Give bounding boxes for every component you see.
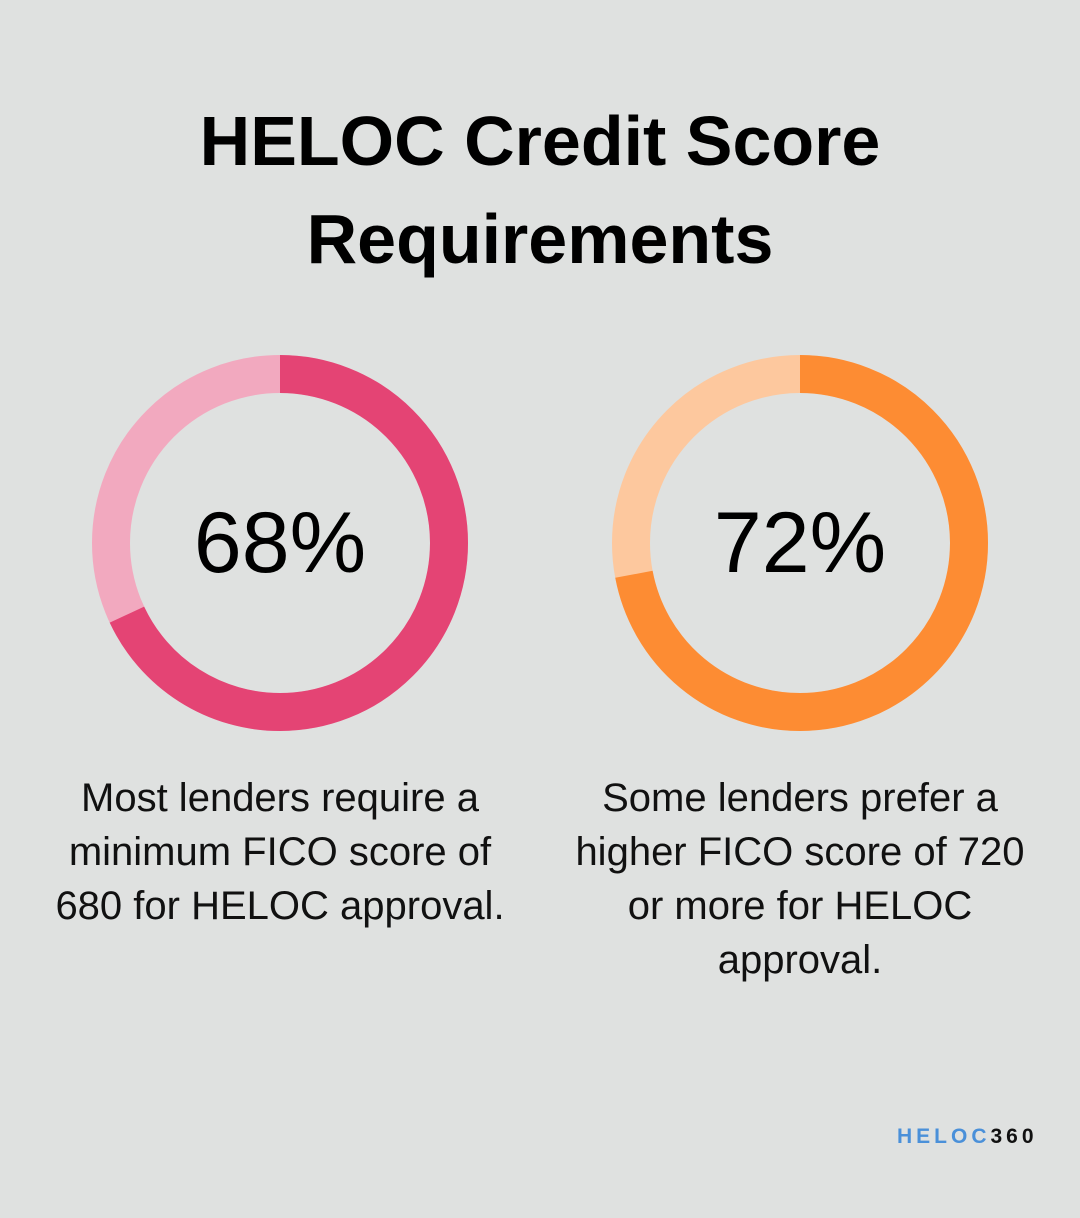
text: left description: minimum FICO score of <box>69 830 491 874</box>
logo: HELOC360 <box>897 1125 1038 1148</box>
title <box>200 102 880 278</box>
text: right description: Some lenders prefer a <box>602 776 998 820</box>
text: left description: 680 for HELOC approval. <box>55 884 505 928</box>
text: right description: approval. <box>718 938 882 982</box>
donut: 68%: 68% <box>194 495 366 591</box>
text: right description: or more for HELOC <box>628 884 972 928</box>
title: Requirements <box>307 200 773 278</box>
text: left description: Most lenders require a <box>81 776 479 820</box>
text: right description: higher FICO score of 720 <box>575 830 1025 874</box>
title: HELOC Credit Score <box>200 102 880 180</box>
donut: 68% <box>92 355 468 731</box>
donut: 72%: 72% <box>714 495 886 591</box>
text: right description <box>575 776 1025 982</box>
donut: 72% <box>612 355 988 731</box>
text: left description <box>55 776 505 928</box>
